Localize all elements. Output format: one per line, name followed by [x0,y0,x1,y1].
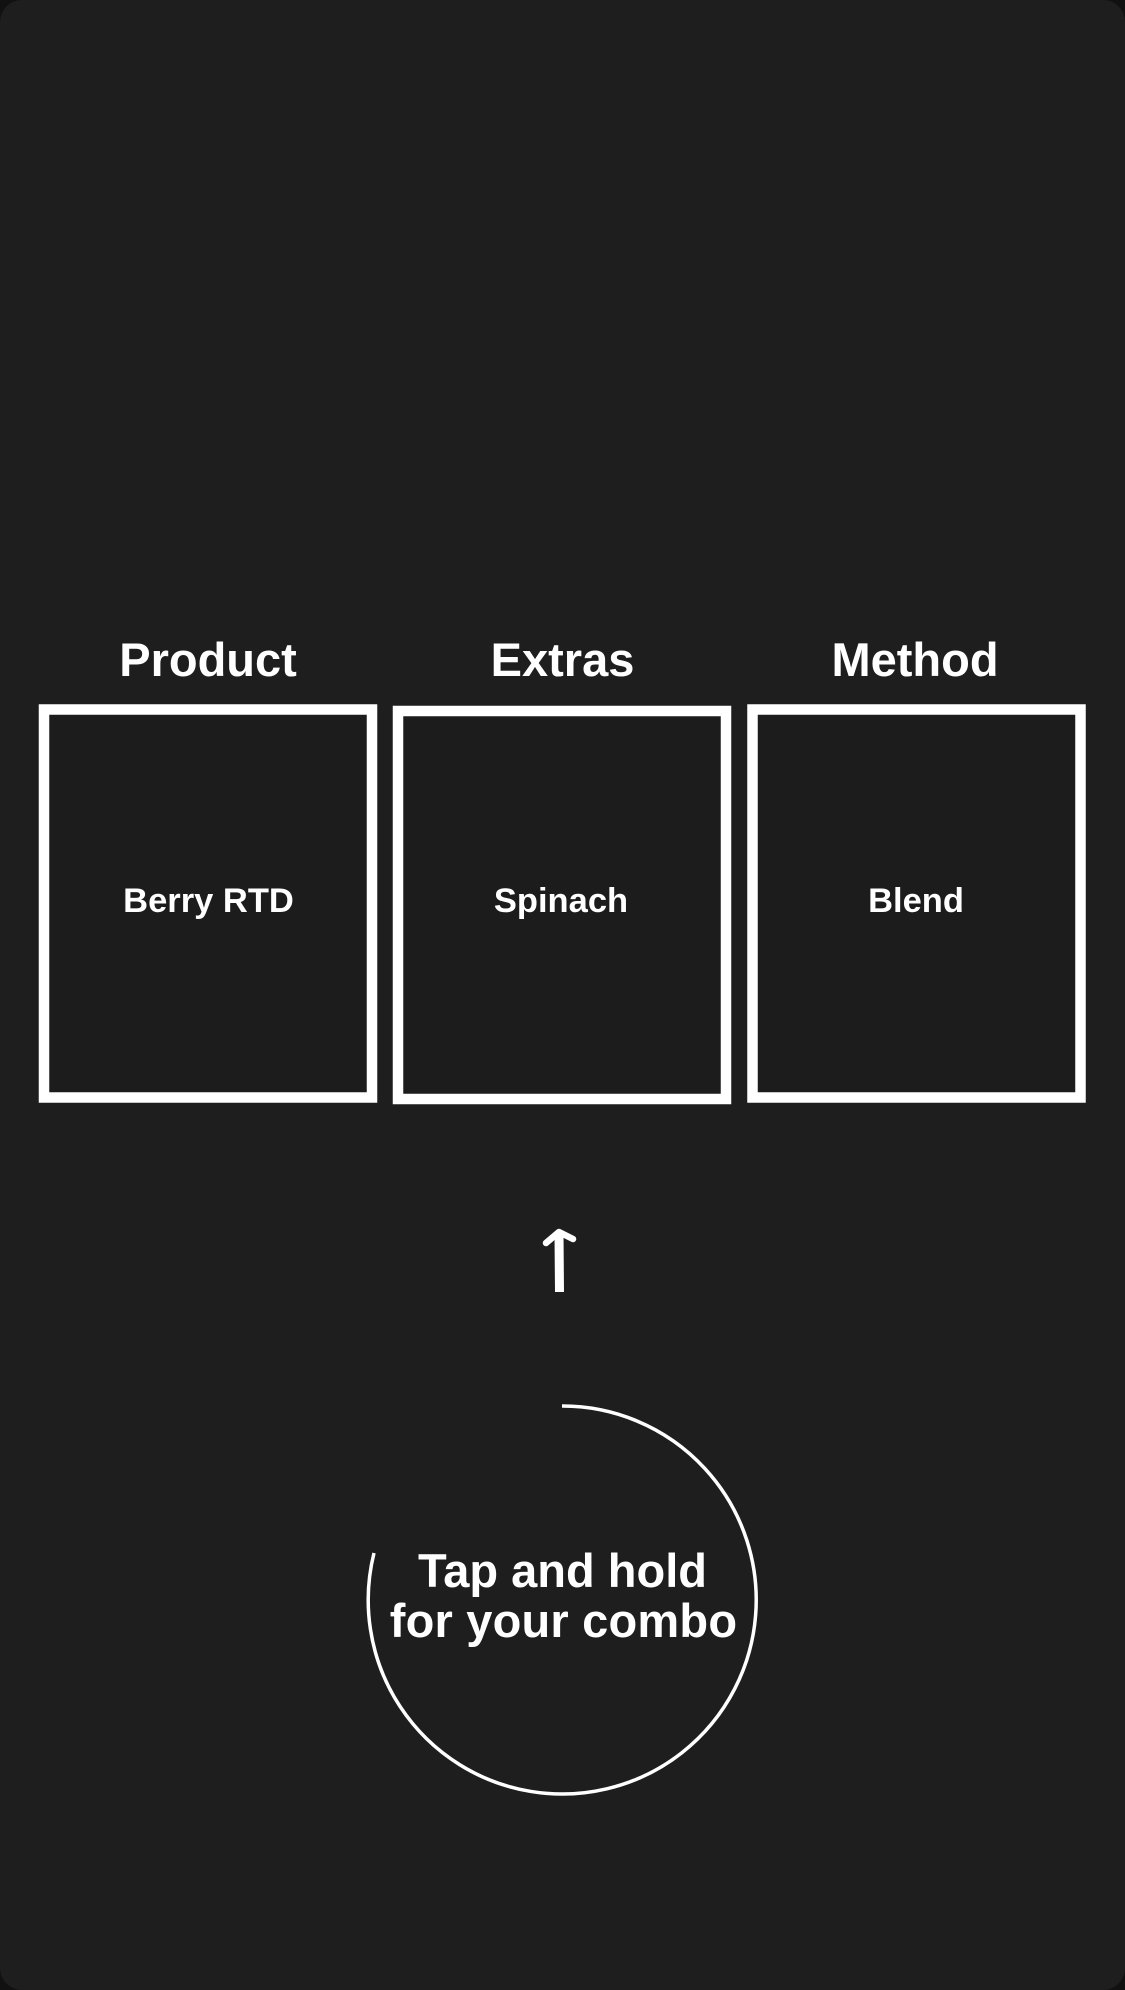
column: product [44,633,372,1098]
label line 1: Tap and hold [418,1544,707,1597]
selection box: extras [398,711,726,1099]
heading: Product: Product [119,633,297,686]
selection box: method [752,710,1080,1098]
selection box: product [44,710,372,1098]
heading: Method: Method [831,633,999,686]
label line 2: for your combo [390,1594,737,1647]
button label [390,1544,737,1647]
box label: Blend: Blend [868,882,964,920]
column: method [752,633,1080,1098]
progress ring arc [368,1406,756,1794]
heading: Extras: Extras [491,633,634,686]
box label: Spinach: Spinach [494,882,628,920]
column: extras [398,633,726,1099]
arrow: up [546,1232,573,1292]
box label: Berry RTD: Berry RTD [123,882,294,920]
